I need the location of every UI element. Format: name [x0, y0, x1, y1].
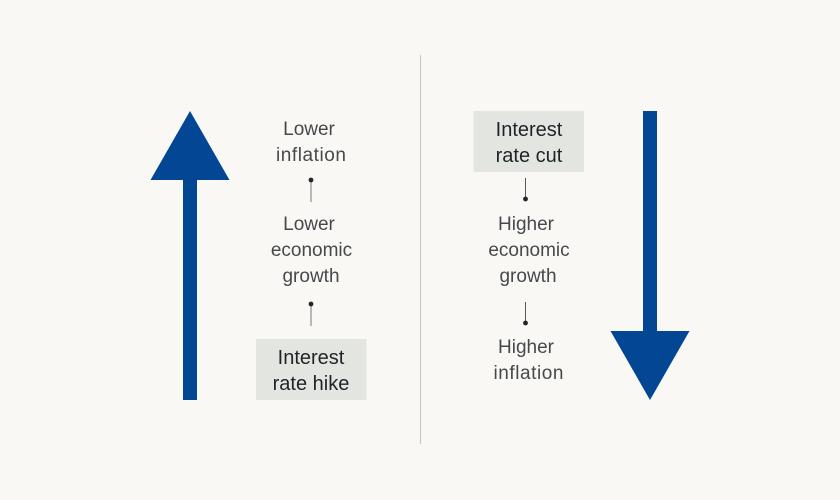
text: lower economic growth: Lower [283, 214, 336, 235]
text: lower economic growth: economic [271, 240, 352, 261]
text: higher economic growth [488, 214, 570, 287]
box: interest rate hike [256, 339, 366, 400]
connector: hike upper [309, 178, 313, 202]
text: lower inflation [276, 119, 346, 166]
connector: cut upper [523, 178, 528, 201]
text: lower economic growth: growth [282, 266, 340, 287]
connector: hike lower [309, 302, 313, 326]
text: lower inflation: inflation [276, 145, 346, 166]
connector: cut lower [523, 302, 528, 325]
text: higher economic growth: Higher [498, 214, 555, 235]
arrow: up [150, 111, 230, 400]
box: interest rate cut: Interest [496, 119, 563, 141]
text: higher economic growth: growth [499, 266, 557, 287]
text: higher inflation [494, 337, 564, 384]
arrow: down [610, 111, 690, 400]
text: higher economic growth: economic [488, 240, 570, 261]
text: higher inflation: inflation [494, 363, 564, 384]
text: higher inflation: Higher [498, 337, 555, 358]
panel: rate hike chain [256, 119, 366, 400]
text: lower economic growth [271, 214, 352, 287]
box: interest rate hike: Interest [278, 347, 345, 369]
box: interest rate cut: rate cut [496, 145, 563, 167]
box: interest rate cut [474, 111, 584, 172]
panel: rate cut chain [474, 111, 584, 384]
text: lower inflation: Lower [283, 119, 336, 140]
box: interest rate hike: rate hike [273, 373, 349, 395]
